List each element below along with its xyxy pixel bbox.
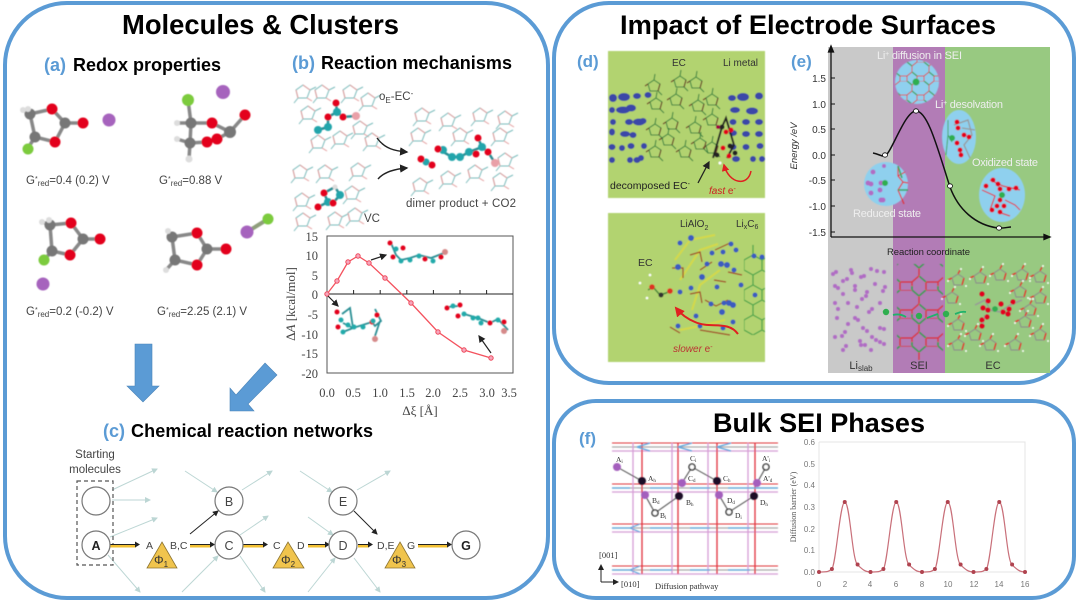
- chart: diffusion barrier: 16: [1021, 580, 1030, 589]
- panel: molecules and clusters: [5, 3, 548, 598]
- molecule 2: [174, 85, 250, 162]
- molecule 3: [36, 217, 106, 290]
- lattice site labels: B: [660, 511, 665, 520]
- heading: chemical reaction networks: Chemical reaction networks: [131, 421, 373, 441]
- lattice site labels: C: [723, 474, 728, 483]
- column labels: slab: [858, 364, 873, 373]
- chart: diffusion barrier: 14: [995, 580, 1004, 589]
- line chart: free energy: 3.0: [479, 386, 495, 400]
- dashed box: [77, 481, 113, 565]
- faint side arrows: [108, 469, 390, 592]
- triangle labels: [154, 553, 407, 569]
- label d: (d): [577, 52, 599, 71]
- redox values: red: [38, 179, 49, 188]
- lattice site labels: B: [686, 498, 691, 507]
- big arrow: redox to network: [127, 344, 159, 402]
- axis labels: -0.5: [809, 176, 826, 187]
- reaction snapshots: [291, 85, 518, 231]
- lattice site labels: h: [653, 479, 656, 484]
- curve markers: [882, 109, 1002, 230]
- triangle labels: 3: [402, 560, 407, 569]
- line chart: free energy: 10: [306, 249, 318, 263]
- chart: diffusion barrier: 0: [817, 580, 822, 589]
- node labels: D: [338, 539, 348, 553]
- reaction labels: o: [379, 91, 385, 103]
- image d bottom: EC on LiAlO2: [608, 213, 765, 362]
- redox values: =0.2 (-0.2) V: [49, 306, 114, 318]
- lattice site labels: d: [657, 501, 660, 506]
- redox values: =2.25 (2.1) V: [180, 306, 247, 318]
- heading: redox properties: Redox properties: [73, 55, 221, 75]
- redox values: red: [169, 310, 180, 319]
- node labels: E: [339, 495, 347, 509]
- chart: diffusion barrier: 0.6: [804, 438, 816, 447]
- image d bottom labels: C: [747, 219, 755, 230]
- node labels: B: [225, 495, 233, 509]
- redox values: *: [35, 176, 38, 183]
- inset: oxidized state: [979, 168, 1025, 222]
- chart: diffusion barrier: 10: [944, 580, 953, 589]
- lattice site labels: h: [728, 479, 731, 484]
- energy curve: [873, 111, 1011, 228]
- chart: diffusion barrier: 8: [920, 580, 925, 589]
- line chart: free energy: 1.5: [399, 386, 415, 400]
- background columns: [828, 47, 1050, 373]
- reaction species labels: A: [146, 540, 153, 552]
- chart: diffusion barrier: 0.2: [804, 525, 816, 534]
- column labels: EC: [985, 360, 1001, 372]
- line chart: free energy: 1.0: [372, 386, 388, 400]
- reaction labels: -: [411, 89, 414, 98]
- inset labels: Reduced state: [853, 208, 921, 220]
- inset: Li desolvation: [942, 110, 976, 164]
- node labels: G: [461, 539, 471, 553]
- triangle labels: Φ: [281, 553, 291, 567]
- triangle labels: Φ: [154, 553, 164, 567]
- image d bottom labels: [638, 219, 759, 355]
- energy profile figure: [789, 46, 1050, 373]
- inset: reduced state: [864, 162, 908, 206]
- redox values: red: [171, 179, 182, 188]
- lattice site labels: d: [693, 479, 696, 484]
- label: starting molecules: molecules: [69, 464, 121, 476]
- line chart: free energy: 15: [306, 230, 318, 244]
- reaction species labels: B,C: [170, 540, 188, 552]
- image d top labels: EC: [672, 58, 686, 69]
- image d bottom labels: Li: [736, 219, 744, 230]
- lattice site labels: D: [727, 496, 732, 505]
- axis labels: -1.0: [809, 202, 826, 213]
- energy profile figure: Energy /eV: [789, 121, 800, 170]
- image d top labels: -: [733, 186, 736, 193]
- lattice: diffusion pathway: [599, 443, 778, 591]
- redox values: *: [168, 176, 171, 183]
- inset labels: Oxidized state: [972, 157, 1038, 169]
- molecule 1: [20, 104, 116, 154]
- title: bulk SEI phases: Bulk SEI Phases: [713, 408, 925, 438]
- reaction species labels: D: [297, 540, 305, 552]
- molecule 4: [163, 214, 274, 273]
- reaction species labels: G: [407, 540, 415, 552]
- image d bottom labels: LiAlO: [680, 219, 704, 230]
- triangle labels: 2: [291, 560, 296, 569]
- line chart: free energy: 0.0: [319, 386, 335, 400]
- inset labels: Li: [935, 99, 943, 111]
- inset labels: Li: [877, 50, 885, 62]
- red arrow d bottom: [676, 308, 738, 334]
- line chart: free energy: 2.5: [452, 386, 468, 400]
- reaction labels: VC: [364, 213, 380, 225]
- big arrow: mechanisms to network: [230, 363, 277, 411]
- image d top labels: Li metal: [723, 58, 758, 69]
- crystal axes: [001]: [599, 550, 618, 560]
- crystal axes: [010]: [621, 579, 640, 589]
- chart: diffusion barrier: 4: [868, 580, 873, 589]
- inset labels: diffusion in SEI: [889, 50, 962, 62]
- label f: (f): [579, 429, 596, 448]
- inset labels: +: [943, 100, 947, 107]
- lattice site labels: i: [769, 459, 771, 464]
- axis labels: 1.0: [812, 100, 826, 111]
- heading: chemical reaction networks: (c): [103, 421, 125, 441]
- lattice site labels: A': [762, 454, 769, 463]
- chart: diffusion barrier: 0.4: [804, 481, 816, 490]
- image d bottom labels: 2: [704, 225, 708, 232]
- axis labels: 1.5: [812, 74, 826, 85]
- inset labels: desolvation: [947, 99, 1003, 111]
- Li slab atoms: [831, 267, 887, 352]
- lattice site labels: h: [691, 503, 694, 508]
- lattice site labels: i: [665, 516, 667, 521]
- reaction labels: [364, 89, 516, 225]
- yellow pathway arrows: [110, 542, 452, 548]
- reaction network diagram: [69, 449, 480, 592]
- panel: bulk SEI phases: [554, 401, 1074, 598]
- image d bottom labels: 6: [755, 224, 759, 231]
- reaction species labels: D,E: [377, 540, 395, 552]
- image d top labels: [610, 58, 758, 197]
- lattice site labels: i: [621, 460, 623, 465]
- black branch arrows: [190, 511, 377, 534]
- line chart: free energy: -15: [301, 347, 318, 361]
- chart: diffusion barrier: Diffusion barrier (eV): [789, 471, 798, 542]
- axis labels: 0.5: [812, 125, 826, 136]
- energy profile figure: Reaction coordinate: [887, 247, 970, 258]
- redox values: red: [38, 310, 49, 319]
- redox values: G: [26, 306, 35, 318]
- line chart: free energy: -5: [308, 308, 318, 322]
- reaction labels: dimer product + CO2: [406, 198, 516, 210]
- image d top labels: fast e: [709, 186, 733, 197]
- line chart: free energy: 5: [312, 269, 318, 283]
- label: starting molecules: Starting: [75, 449, 115, 461]
- line chart: free energy: -10: [301, 328, 318, 342]
- lattice site labels: C: [690, 454, 695, 463]
- line chart: free energy: -20: [301, 367, 318, 381]
- lattice site labels: D: [760, 498, 765, 507]
- line chart: free energy: Δξ [Å]: [402, 403, 438, 418]
- lattice site labels: d: [770, 479, 773, 484]
- image d top: EC on Li metal: [608, 51, 765, 198]
- chart: diffusion barrier: 6: [894, 580, 899, 589]
- axes: [828, 46, 1050, 240]
- reaction labels: -EC: [391, 91, 411, 103]
- EC molecules: [941, 263, 1049, 352]
- line chart: free energy: 0: [312, 288, 318, 302]
- lattice site labels: i: [695, 459, 697, 464]
- line chart: free energy: [283, 230, 517, 418]
- inset: Li diffusion in SEI: [895, 60, 939, 104]
- chart: diffusion barrier: 2: [843, 580, 848, 589]
- lattice site labels: B: [652, 496, 657, 505]
- chart: diffusion barrier: 12: [970, 580, 979, 589]
- axis labels: 0.0: [812, 151, 826, 162]
- node labels: [91, 495, 471, 553]
- inset labels: [853, 50, 1038, 220]
- lattice site labels: C: [688, 474, 693, 483]
- lattice site labels: D: [735, 511, 740, 520]
- chart: diffusion barrier: 0.5: [804, 460, 816, 469]
- arrows d top: [698, 162, 751, 183]
- line chart: free energy: 2.0: [425, 386, 441, 400]
- panel: impact of electrode surfaces: [554, 3, 1074, 383]
- image d bottom labels: EC: [638, 257, 653, 269]
- node circles: [82, 487, 480, 559]
- redox values: *: [166, 307, 169, 314]
- title: molecules and clusters: Molecules & Clusters: [122, 9, 399, 40]
- inset labels: +: [885, 51, 889, 58]
- axis labels: -1.5: [809, 228, 826, 239]
- lattice site labels: A: [648, 474, 653, 483]
- label e: (e): [791, 52, 812, 71]
- Li ions and migration arrows: [883, 309, 966, 319]
- crystal axes: [599, 550, 719, 591]
- lattice site labels: [616, 454, 773, 521]
- SEI lattice: [897, 264, 943, 360]
- node labels: A: [91, 539, 101, 553]
- triangles phi: [147, 542, 415, 568]
- image d bottom labels: slower e: [673, 344, 710, 355]
- chart: diffusion barrier: 0.3: [804, 503, 816, 512]
- lattice site labels: d: [732, 501, 735, 506]
- redox values: G: [26, 175, 35, 187]
- redox values: =0.4 (0.2) V: [49, 175, 110, 187]
- chart: diffusion barrier: 0.1: [804, 546, 816, 555]
- heading: reaction mechanisms: Reaction mechanisms: [321, 53, 512, 73]
- column labels: Li: [849, 360, 858, 372]
- image d bottom labels: x: [744, 224, 748, 231]
- line chart: free energy: ΔA [kcal/mol]: [283, 267, 298, 341]
- chart: diffusion barrier: [789, 438, 1030, 589]
- axis labels: [809, 74, 826, 239]
- lattice site labels: A': [763, 474, 770, 483]
- triangle labels: 1: [164, 560, 169, 569]
- molecule group: redox structures: [20, 85, 274, 290]
- lattice site labels: A: [616, 455, 621, 464]
- redox values: =0.88 V: [182, 175, 223, 187]
- column labels: [849, 360, 1001, 373]
- heading: redox properties: (a): [44, 55, 66, 75]
- heading: reaction mechanisms: (b): [292, 53, 315, 73]
- line chart: free energy: 3.5: [501, 386, 517, 400]
- lattice site labels: i: [740, 516, 742, 521]
- lattice site labels: h: [765, 503, 768, 508]
- line chart: free energy: 0.5: [345, 386, 361, 400]
- image d top labels: -: [688, 181, 691, 188]
- title: impact of electrode surfaces: Impact of Electrode Surfaces: [620, 10, 996, 40]
- reaction species labels: [146, 540, 415, 552]
- chart insets: molecule snapshots: [334, 240, 508, 342]
- column labels: SEI: [910, 360, 928, 372]
- reaction species labels: C: [273, 540, 281, 552]
- redox values: G: [157, 306, 166, 318]
- chart: diffusion barrier: 0.0: [804, 568, 816, 577]
- node labels: C: [224, 539, 234, 553]
- redox values: G: [159, 175, 168, 187]
- triangle labels: Φ: [392, 553, 402, 567]
- crystal axes: Diffusion pathway: [655, 581, 719, 591]
- image d bottom labels: -: [710, 344, 713, 351]
- redox values: *: [35, 307, 38, 314]
- chart arrows: [328, 255, 491, 353]
- reaction labels: E: [385, 96, 391, 105]
- redox values: [26, 175, 247, 319]
- image d top labels: decomposed EC: [610, 180, 688, 192]
- arrows: reactants to product: [377, 138, 407, 179]
